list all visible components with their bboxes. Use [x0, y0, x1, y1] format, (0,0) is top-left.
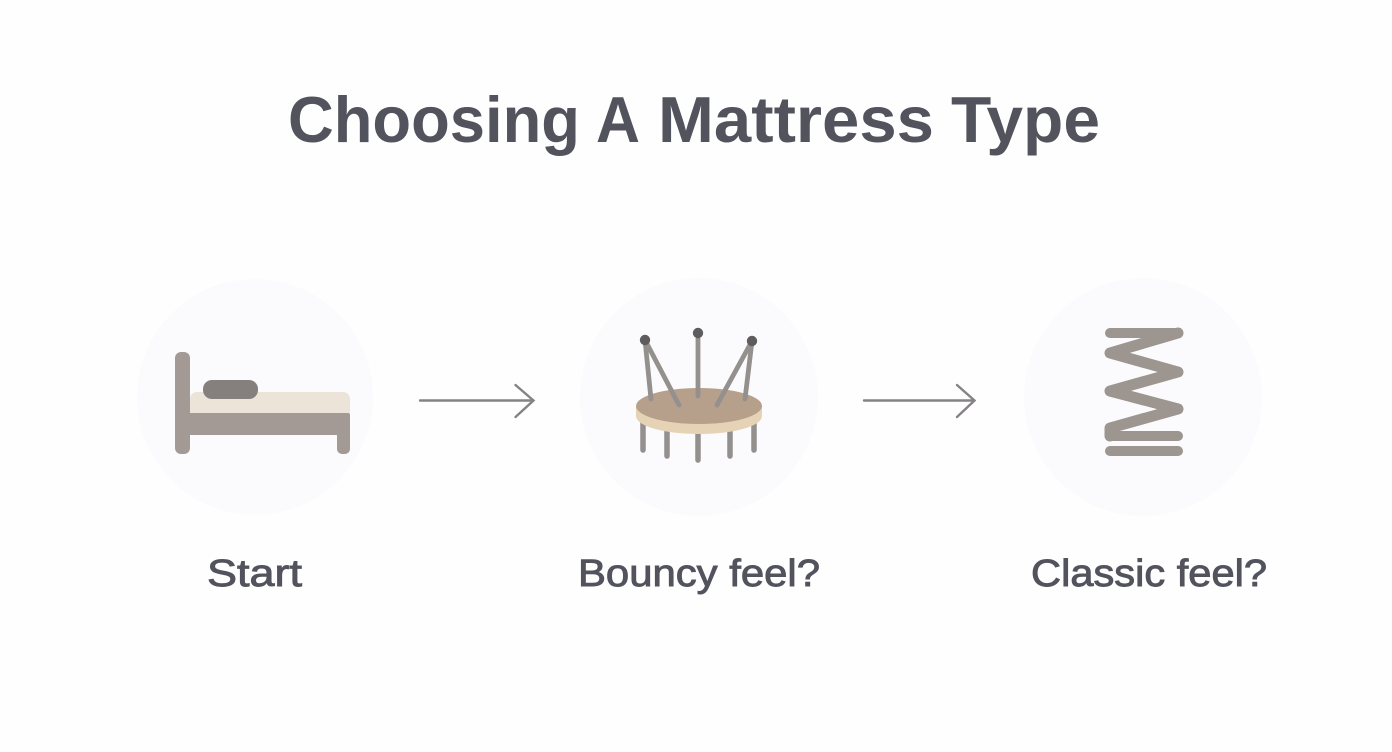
icon: trampoline: [636, 328, 762, 460]
step 3: classic feel: [1024, 278, 1267, 595]
title: A: [596, 83, 640, 156]
title: Choosing: [288, 83, 580, 156]
trampoline mat: [636, 388, 762, 424]
label: bouncy feel: Bouncy feel?: [578, 553, 820, 595]
trampoline legs: [643, 420, 754, 460]
label: classic feel: Classic feel?: [1031, 553, 1267, 595]
icon: bed: [175, 352, 350, 454]
trampoline poles: [645, 333, 752, 405]
circle background: start: [137, 279, 373, 515]
circle background: classic: [1024, 278, 1262, 516]
title: Mattress: [658, 83, 934, 156]
trampoline rim: [636, 406, 762, 434]
label: start: Start: [207, 553, 303, 595]
trampoline pole tops: [640, 328, 757, 346]
title: [288, 83, 1100, 156]
title: Type: [951, 83, 1100, 156]
icon: spring: [1110, 333, 1178, 451]
circle background: bouncy: [580, 278, 818, 516]
arrow: start to bouncy: [420, 385, 534, 417]
arrow: bouncy to classic: [864, 385, 974, 417]
step 1: start: [137, 279, 373, 595]
step 2: bouncy feel: [578, 278, 820, 595]
